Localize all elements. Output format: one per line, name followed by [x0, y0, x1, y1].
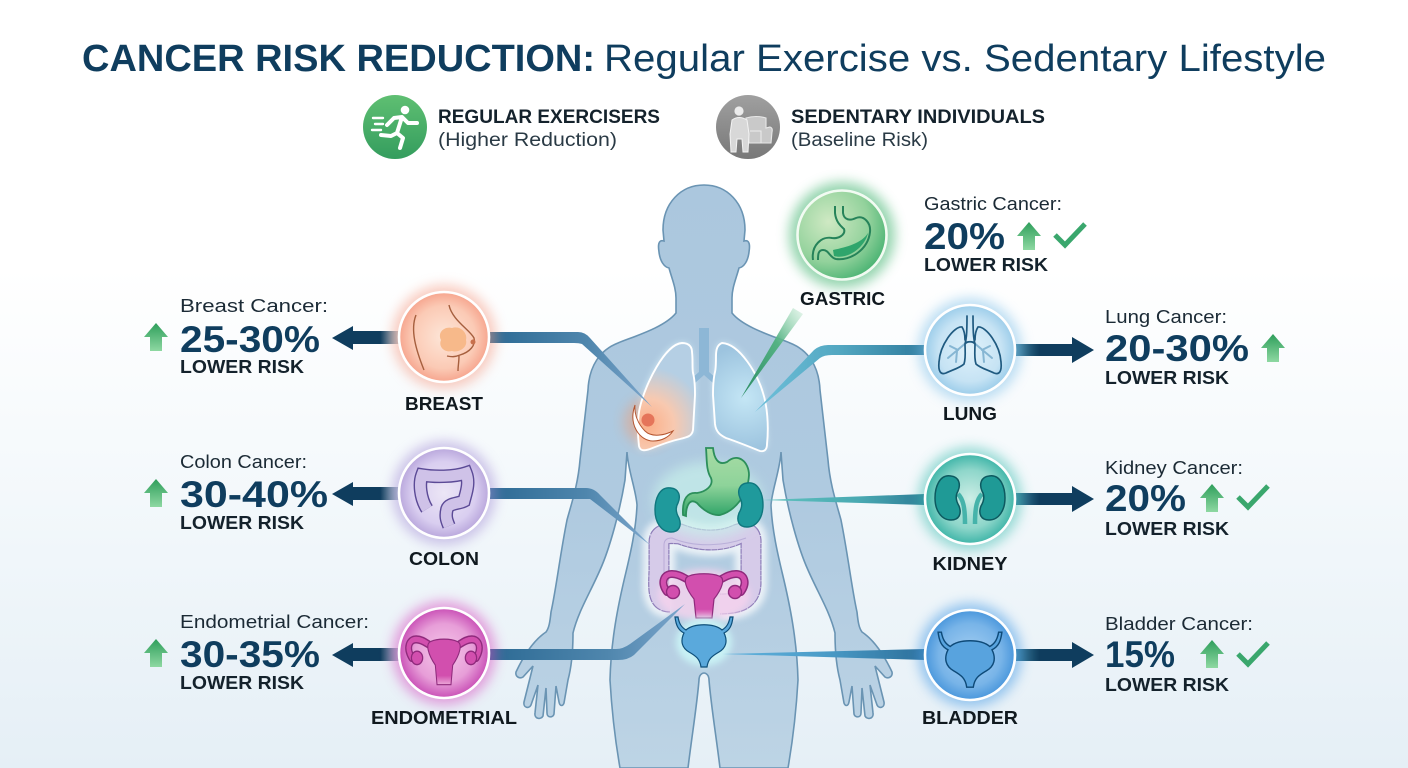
organs: uterus — [658, 569, 750, 621]
connector: breast — [490, 332, 652, 407]
panel: bladder — [918, 603, 1268, 728]
arrow — [1016, 642, 1094, 668]
icon: bladder badge — [918, 603, 1022, 707]
title: CANCER RISK REDUCTION: — [82, 38, 595, 80]
panel: endometrial: LOWER RISK — [180, 672, 305, 693]
connector: endometrial — [490, 604, 685, 660]
panel: lung: Lung Cancer: — [1105, 306, 1227, 327]
legend: sedentary individuals: (Baseline Risk) — [791, 130, 928, 151]
panel: breast: Breast Cancer: — [180, 295, 328, 316]
panel: bladder: BLADDER — [922, 707, 1018, 728]
arrow — [332, 643, 399, 667]
arrow — [1016, 337, 1094, 363]
panel: gastric: 20% — [924, 216, 1005, 257]
icon: lung badge — [918, 298, 1022, 402]
panel: colon: Colon Cancer: — [180, 451, 307, 472]
icon: colon badge — [392, 441, 496, 545]
icon: uterus badge — [392, 601, 496, 705]
panel: colon: COLON — [409, 548, 479, 569]
panel: lung: LUNG — [943, 403, 997, 424]
panel: breast: BREAST — [405, 393, 484, 414]
panel: colon — [144, 441, 496, 569]
human body silhouette — [516, 185, 892, 768]
arrow — [1016, 486, 1094, 512]
panel: kidney — [918, 447, 1268, 574]
panel: lung — [918, 298, 1285, 424]
organs: colon — [659, 533, 751, 604]
panel: bladder: 15% — [1105, 634, 1175, 675]
organs: bladder — [675, 617, 733, 667]
panel: kidney: LOWER RISK — [1105, 518, 1230, 539]
arrow — [332, 482, 399, 506]
panel: bladder: Bladder Cancer: — [1105, 613, 1253, 634]
panel: gastric: GASTRIC — [800, 288, 885, 309]
panel: breast: 25-30% — [180, 319, 320, 360]
panel: endometrial — [144, 601, 517, 728]
panel: endometrial: 30-35% — [180, 634, 320, 675]
panel: colon: 30-40% — [180, 474, 328, 515]
panel: endometrial: Endometrial Cancer: — [180, 611, 369, 632]
connector: lung — [755, 345, 925, 412]
icon: person on sofa — [716, 95, 780, 159]
icon: runner — [363, 95, 427, 159]
connector: bladder — [722, 649, 925, 660]
panel: kidney: 20% — [1105, 478, 1186, 519]
organs: lungs with breast marker — [624, 328, 768, 451]
legend: sedentary individuals — [716, 95, 1045, 159]
panel: lung: LOWER RISK — [1105, 367, 1230, 388]
icon: kidney badge — [918, 447, 1022, 551]
panel: bladder: LOWER RISK — [1105, 674, 1230, 695]
panel: gastric — [789, 182, 1085, 309]
title: Regular Exercise vs. Sedentary Lifestyle — [604, 38, 1326, 80]
title — [82, 38, 1326, 80]
legend: regular exercisers: REGULAR EXERCISERS — [438, 107, 660, 128]
panel: endometrial: ENDOMETRIAL — [371, 707, 517, 728]
connector: kidney — [762, 494, 925, 505]
icon: stomach badge — [789, 182, 895, 288]
panel: gastric: Gastric Cancer: — [924, 193, 1062, 214]
icon: breast badge — [392, 285, 496, 389]
organs: stomach and kidneys — [653, 448, 763, 538]
panel: breast — [144, 285, 496, 414]
panel: lung: 20-30% — [1105, 328, 1249, 369]
legend: sedentary individuals: SEDENTARY INDIVIDUALS — [791, 107, 1045, 128]
connector: gastric — [741, 308, 803, 398]
panel: kidney: KIDNEY — [932, 553, 1008, 574]
legend: regular exercisers: (Higher Reduction) — [438, 130, 617, 151]
panel: kidney: Kidney Cancer: — [1105, 457, 1243, 478]
arrow — [332, 326, 399, 350]
legend: regular exercisers — [363, 95, 660, 159]
panel: breast: LOWER RISK — [180, 356, 305, 377]
panel: colon: LOWER RISK — [180, 512, 305, 533]
panel: gastric: LOWER RISK — [924, 254, 1049, 275]
connector: colon — [490, 488, 650, 545]
